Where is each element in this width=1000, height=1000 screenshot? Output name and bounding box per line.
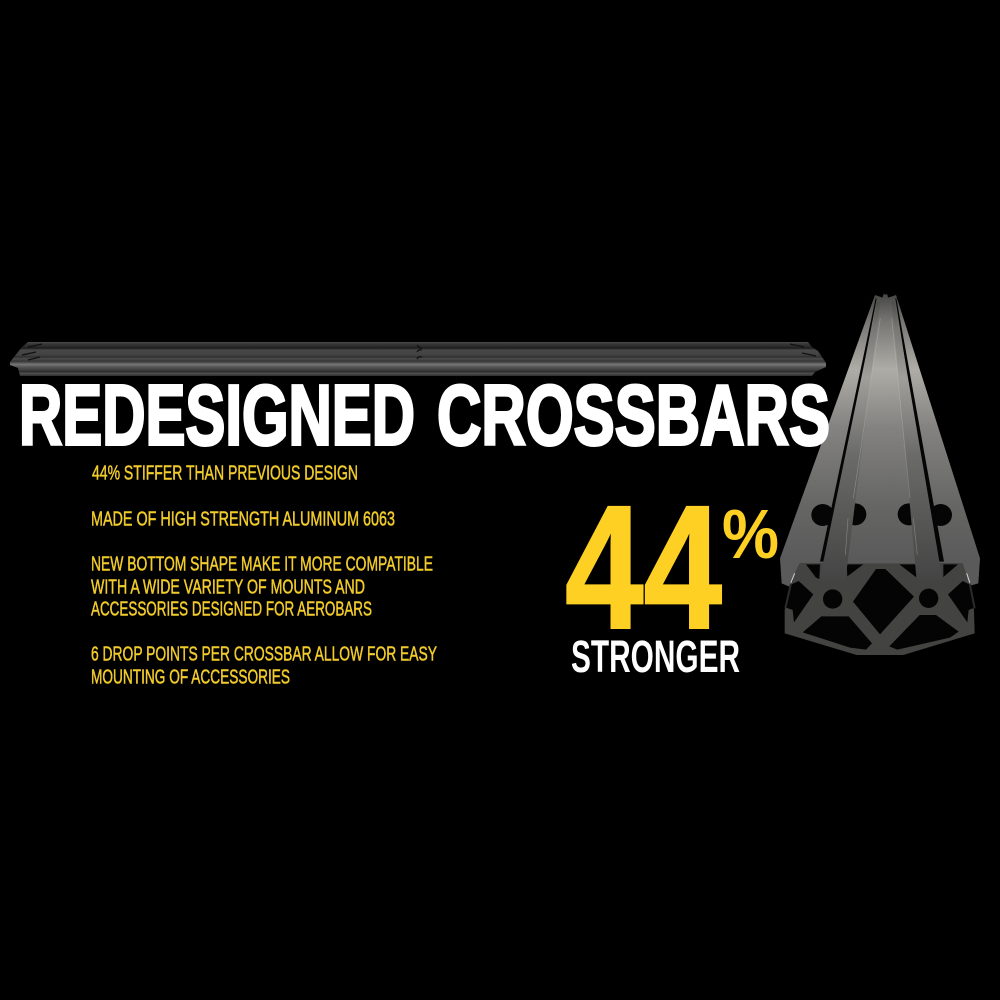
feature: compatibility: ACCESSORIES DESIGNED FOR AEROBARS (91, 598, 372, 620)
feature: compatibility (91, 552, 433, 620)
feature: compatibility: WITH A WIDE VARIETY OF MOUNTS AND (91, 576, 365, 598)
feature list (91, 462, 437, 688)
feature: drop points: 6 DROP POINTS PER CROSSBAR ALLOW FOR EASY (91, 642, 437, 666)
big number: 44 (565, 470, 722, 666)
callout: 44% stronger (565, 470, 779, 682)
bar top surface (780, 294, 980, 587)
feature: drop points (91, 642, 437, 688)
cross section cutouts (786, 564, 975, 650)
feature: stiffness: 44% STIFFER THAN PREVIOUS DESIGN (92, 462, 358, 484)
feature: drop points: MOUNTING OF ACCESSORIES (91, 666, 290, 688)
stronger label: STRONGER (571, 631, 740, 682)
title: REDESIGNED (19, 368, 415, 464)
extrusion cross section (785, 563, 975, 655)
crossbar end view in perspective (780, 294, 980, 655)
percent sign: % (722, 495, 779, 573)
black slots (820, 298, 944, 562)
title: CROSSBARS (437, 368, 830, 464)
feature: material: MADE OF HIGH STRENGTH ALUMINUM 6063 (91, 508, 395, 530)
channel highlights (845, 318, 917, 555)
front lip (845, 556, 917, 563)
horizontal crossbar side view (10, 342, 826, 376)
side clips (785, 573, 975, 608)
raised channels (819, 302, 943, 581)
title (19, 368, 830, 464)
drop point holes (811, 503, 952, 526)
feature: compatibility: NEW BOTTOM SHAPE MAKE IT MORE COMPATIBLE (91, 552, 433, 576)
